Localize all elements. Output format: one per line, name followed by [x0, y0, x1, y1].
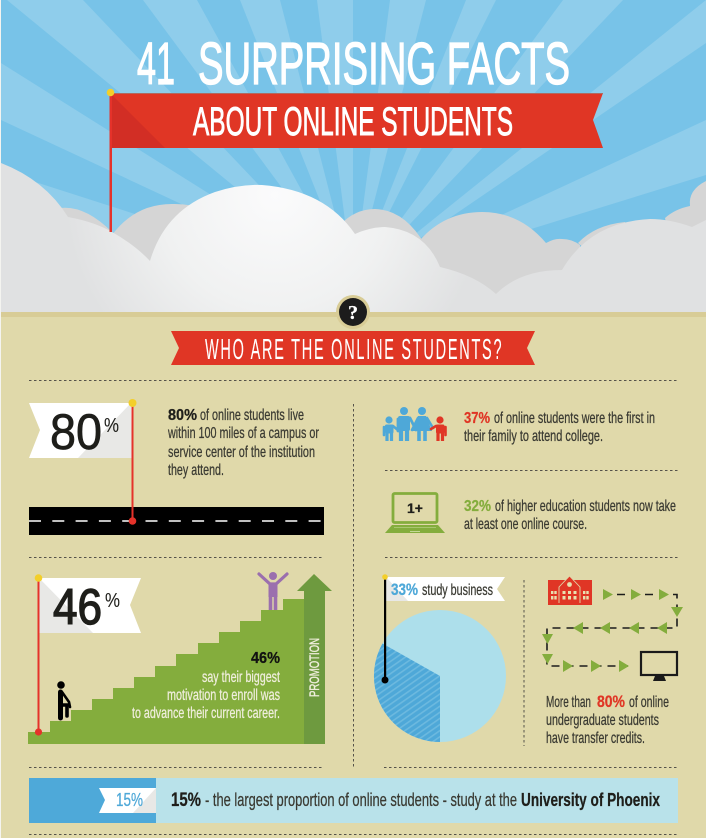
- text: transfer credits stat: More than: [546, 694, 591, 711]
- banner: about online students: ABOUT ONLINE STUDENTS: [193, 100, 513, 144]
- text: 37% stat: 37%: [464, 410, 490, 427]
- text: 15% stat: - the largest proportion of online students - study at the: [205, 790, 517, 810]
- panel: 37 percent first in family: [384, 407, 655, 445]
- flag: 80%: [29, 399, 136, 525]
- arrow: promotion: PROMOTION: [306, 638, 322, 697]
- staircase chart: [28, 599, 304, 744]
- text: transfer credits stat: 80%: [597, 692, 625, 711]
- icon: celebrating person: [259, 572, 287, 610]
- text: 46% stat: 46%: [251, 650, 280, 667]
- text: 37% stat: their family to attend college.: [464, 428, 603, 445]
- icon: family: [384, 407, 446, 441]
- flag: 80%: %: [104, 415, 119, 437]
- text: transfer credits stat: of online: [629, 694, 669, 711]
- panel: 80 percent transfer credits: [542, 576, 683, 747]
- arrow: promotion: [297, 574, 332, 744]
- text: 80% stat: 80%: [168, 407, 197, 424]
- title: [137, 31, 570, 97]
- text: 37% stat: [464, 410, 655, 445]
- text: transfer credits stat: [546, 692, 669, 747]
- text: 32% stat: at least one online course.: [464, 516, 587, 533]
- text: 80% stat: service center of the institution: [168, 444, 315, 461]
- pie chart: [374, 610, 506, 742]
- panel: 32 percent take online course: [385, 494, 676, 533]
- flag: 46%: %: [105, 590, 120, 612]
- text: 46% stat: to advance their current career.: [132, 705, 280, 722]
- flag: 33% study business: [382, 574, 505, 684]
- icon: laptop: 1+: [407, 500, 423, 516]
- text: 80% stat: within 100 miles of a campus or: [167, 425, 319, 442]
- text: 80% stat: of online students live: [200, 407, 304, 424]
- icon: laptop: [385, 494, 445, 533]
- icon: question mark: ?: [348, 302, 358, 324]
- icon: question mark: [336, 295, 370, 329]
- flag: 33% study business: study business: [422, 582, 493, 599]
- arrow: dashed route from school to computer: [542, 589, 683, 672]
- title: 41: [137, 31, 175, 97]
- flag: 15%: [99, 788, 156, 813]
- icon: school: [548, 576, 592, 605]
- panel: 33 percent study business: [374, 574, 506, 742]
- clouds: [1, 163, 706, 312]
- flag: 80%: 80: [50, 404, 102, 460]
- flag: 15%: 15%: [116, 790, 143, 810]
- text: 46% stat: [132, 650, 280, 722]
- icon: walking person: [57, 681, 70, 718]
- flag: 46%: 46: [53, 579, 102, 635]
- panel: University of Phoenix bar: [29, 778, 678, 823]
- flag: 33% study business: 33%: [391, 580, 418, 599]
- flag: 46%: [35, 574, 141, 736]
- road: [29, 507, 324, 535]
- section heading banner: WHO ARE THE ONLINE STUDENTS?: [205, 332, 503, 365]
- banner: about online students: [107, 89, 603, 232]
- text: 32% stat: 32%: [464, 498, 491, 515]
- panel: 46 percent career motivation: [28, 572, 332, 744]
- ground strip: [1, 312, 706, 317]
- text: 15% stat: 15%: [171, 790, 201, 811]
- text: 80% stat: they attend.: [168, 462, 224, 479]
- icon: computer monitor: [641, 652, 677, 681]
- text: 32% stat: [464, 498, 676, 533]
- text: transfer credits stat: have transfer credits.: [546, 730, 645, 747]
- text: 80% stat: [167, 407, 319, 479]
- text: 15% stat: University of Phoenix: [521, 790, 660, 810]
- text: 46% stat: say their biggest: [202, 669, 280, 686]
- sky with sun rays: [1, 0, 706, 315]
- text: 46% stat: motivation to enroll was: [167, 687, 280, 704]
- panel: 80 percent live near campus: [29, 399, 324, 535]
